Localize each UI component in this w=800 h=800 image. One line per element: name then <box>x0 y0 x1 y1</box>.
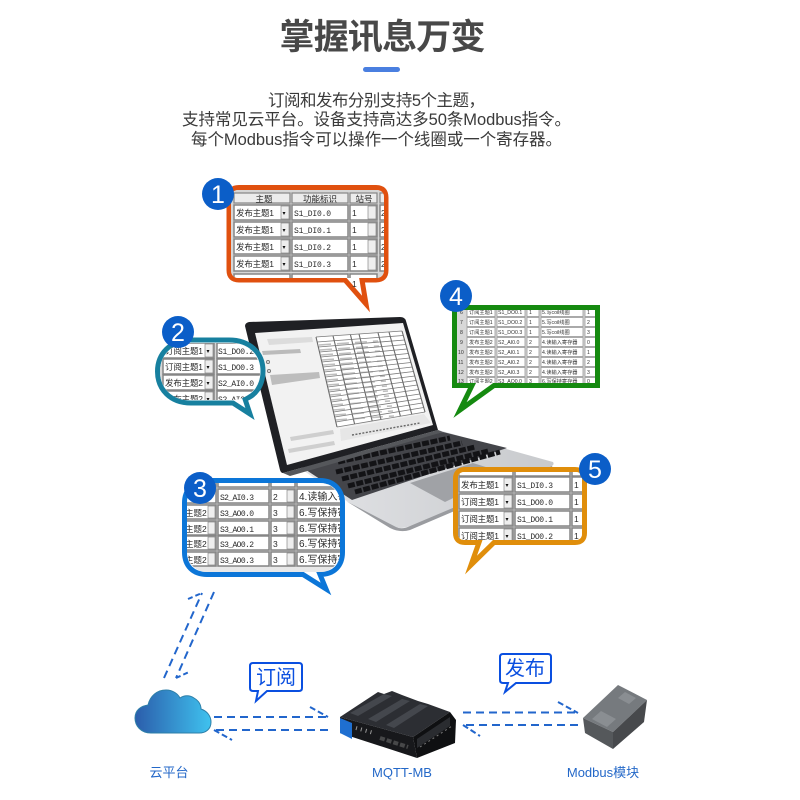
table 4: S3_AO0.0 <box>498 379 522 385</box>
callout: subscribe: 订阅 <box>256 666 296 689</box>
table 3: 主题2 <box>185 524 207 534</box>
table 4: 4.读输入寄存器 <box>542 348 578 356</box>
table 4: 2 <box>529 370 532 376</box>
table 1: 2 <box>381 208 386 218</box>
table 4: 1 <box>587 310 590 316</box>
table 4: 1 <box>529 310 532 316</box>
table 2: S1_DO0.2 <box>218 348 254 357</box>
table 4: 1 <box>587 350 590 356</box>
table 1: 2 <box>381 225 386 235</box>
table 4: 3 <box>587 370 590 376</box>
table 4: 5.写coil线圈 <box>542 308 570 316</box>
table 3: 主题2 <box>185 508 207 518</box>
table 3: 3 <box>273 524 278 534</box>
table 4: 13 <box>458 379 464 385</box>
arrows: callout to cloud <box>164 592 214 678</box>
callout 2: teal table <box>158 316 263 414</box>
arrows: gateway and Modbus module <box>463 702 578 736</box>
table 2: 发布主题2 <box>165 394 203 404</box>
table 4: 发布主题2 <box>469 368 493 376</box>
table 4: 0 <box>587 379 590 385</box>
table 5: S1_DO0.0 <box>517 499 553 508</box>
table 2: S2_AI0 <box>218 396 245 405</box>
laptop lid <box>245 317 438 473</box>
table 3: 6.写保持寄存器 <box>299 537 367 550</box>
badge 5 <box>579 453 611 485</box>
table 4: 5.写coil线圈 <box>542 318 570 326</box>
intro text: 订阅和发布分别支持5个主题， <box>268 91 485 110</box>
table 1: 主题 <box>255 194 273 204</box>
table 3: S3_AO0.2 <box>220 541 254 550</box>
table 4: S2_AI0.3 <box>498 370 519 376</box>
table 4: 10 <box>458 350 464 356</box>
table 1: 发布主题1 <box>236 242 274 252</box>
table 1: S1_DI0.3 <box>294 261 331 270</box>
table 2: S1_DO0.3 <box>218 364 254 373</box>
table 5: S1_DI0.3 <box>517 482 553 491</box>
table 1: 1 <box>352 225 357 235</box>
table 3: 4.读输入寄存器 <box>299 490 367 503</box>
badge 1: 1 <box>211 181 225 209</box>
table 4: 6.写保持寄存器 <box>542 377 578 385</box>
badge 3: 3 <box>193 475 207 503</box>
table 1: 功能标识 <box>303 194 337 204</box>
table 5: S1_DO0.2 <box>517 533 553 542</box>
callout 4: green table <box>440 280 598 410</box>
table 1: ▾ <box>282 262 286 268</box>
table 2: 订阅主题1 <box>165 346 203 356</box>
table 4: 1 <box>529 320 532 326</box>
table 4: S2_AI0.2 <box>498 360 519 366</box>
table 4: 订阅主题1 <box>469 328 493 336</box>
intro text: 每个Modbus指令可以操作一个线圈或一个寄存器。 <box>191 130 562 149</box>
screen table <box>316 331 431 441</box>
table 5: ▾ <box>506 517 509 523</box>
table 4: 7 <box>460 320 463 326</box>
table 4: 2 <box>587 320 590 326</box>
laptop hinge <box>283 430 443 476</box>
table 1 <box>231 190 384 278</box>
arrows: cloud and gateway <box>214 707 328 740</box>
table 1: 2 <box>381 259 386 269</box>
table 4 <box>457 308 597 386</box>
table 4: 12 <box>458 370 464 376</box>
table 4: 发布主题2 <box>469 338 493 346</box>
callout: publish <box>500 654 551 692</box>
table 4: 订阅主题2 <box>469 377 493 385</box>
table 2: S2_AI0.0 <box>218 380 254 389</box>
table 1: S1_DI0.0 <box>294 210 331 219</box>
table 3: 3 <box>273 508 278 518</box>
badge 1 <box>202 178 234 210</box>
touchpad <box>410 463 505 502</box>
table 1: S1_DI0.2 <box>294 244 331 253</box>
table 5: 1 <box>574 480 579 490</box>
table 5: 1 <box>574 514 579 524</box>
table 4: 11 <box>458 360 463 366</box>
table 3: 6.写保持寄存器 <box>299 522 367 535</box>
label: Modbus module: Modbus模块 <box>567 765 639 780</box>
table 4: 发布主题2 <box>469 358 493 366</box>
table 5: ▾ <box>506 534 509 540</box>
table 3: 主题2 <box>185 539 207 549</box>
table 3: 6.写保持寄存器 <box>299 506 367 519</box>
laptop <box>245 317 554 531</box>
table 4: S2_AI0.0 <box>498 340 519 346</box>
table 3: 3 <box>273 539 278 549</box>
icon: MQTT-MB gateway <box>340 691 456 758</box>
table 5: 1 <box>574 497 579 507</box>
table 4: S1_DO0.2 <box>498 320 522 326</box>
table 4: 2 <box>529 360 532 366</box>
table 3: 主题2 <box>185 555 207 565</box>
table 4: 3 <box>587 330 590 336</box>
table 4: S1_DO0.3 <box>498 330 522 336</box>
table 1: 发布主题1 <box>236 208 274 218</box>
title: 掌握讯息万变 <box>280 18 486 57</box>
table 4: 订阅主题1 <box>469 308 493 316</box>
table 1: 1 <box>352 242 357 252</box>
table 2: ▾ <box>206 349 210 355</box>
table 4: 4.读输入寄存器 <box>542 338 578 346</box>
icon: cloud <box>135 690 211 733</box>
table 4: 4.读输入寄存器 <box>542 368 578 376</box>
table 1: ▾ <box>282 211 286 217</box>
table 3: 2 <box>273 492 278 502</box>
table 3: S3_AO0.1 <box>220 526 254 535</box>
keyboard <box>300 432 507 500</box>
table 1 overflow row: 1 <box>352 279 357 289</box>
table 5: S1_DO0.1 <box>517 516 553 525</box>
table 4: S2_AI0.1 <box>498 350 519 356</box>
callout 1: orange-red table <box>202 178 390 304</box>
table 4: 5.写coil线圈 <box>542 328 570 336</box>
intro text: 支持常见云平台。设备支持高达多50条Modbus指令。 <box>182 110 571 129</box>
table 3 <box>187 483 340 572</box>
badge 4: 4 <box>449 283 463 311</box>
callout: publish: 发布 <box>505 657 545 680</box>
table 4: 2 <box>529 340 532 346</box>
label: MQTT-MB: MQTT-MB <box>372 765 432 780</box>
table 4: 9 <box>460 340 463 346</box>
badge 4 <box>440 280 472 312</box>
table 1: ▾ <box>282 245 286 251</box>
table 1: 发布主题1 <box>236 225 274 235</box>
callout 5: amber table <box>456 453 611 565</box>
table 2 <box>160 343 260 400</box>
table 1: ▾ <box>282 228 286 234</box>
table 1: S1_DI0.1 <box>294 227 331 236</box>
table 5: ▾ <box>506 500 509 506</box>
callout 3: blue table <box>182 472 345 596</box>
title accent bar <box>363 67 400 72</box>
table 2: 订阅主题1 <box>165 362 203 372</box>
table 2: ▾ <box>206 397 210 403</box>
table 4: 4.读输入寄存器 <box>542 358 578 366</box>
table 5: 订阅主题1 <box>461 497 499 507</box>
table 3: S2_AI0.3 <box>220 494 254 503</box>
table 5: 发布主题1 <box>461 480 499 490</box>
table 5: 1 <box>574 531 579 541</box>
table 5: 订阅主题1 <box>461 531 499 541</box>
table 3: S3_AO0.3 <box>220 557 254 566</box>
badge 2: 2 <box>171 319 185 347</box>
table 3: 3 <box>273 555 278 565</box>
table 1: 1 <box>352 208 357 218</box>
table 5: 订阅主题1 <box>461 514 499 524</box>
laptop base deck <box>300 430 554 528</box>
table 5: ▾ <box>506 483 509 489</box>
table 5 <box>458 472 582 540</box>
table 2: 发布主题2 <box>165 378 203 388</box>
table 1: 1 <box>352 259 357 269</box>
table 4: 2 <box>587 360 590 366</box>
table 4: 3 <box>529 379 532 385</box>
label: cloud platform: 云平台 <box>149 765 189 780</box>
table 4: 8 <box>460 330 463 336</box>
screen <box>255 323 433 465</box>
table 4: S1_DO0.1 <box>498 310 522 316</box>
badge 5: 5 <box>588 456 602 484</box>
table 4: 6 <box>460 310 463 316</box>
badge 3 <box>184 472 216 504</box>
icon: Modbus module <box>583 685 647 749</box>
table 1: 2 <box>381 242 386 252</box>
table 2: ▾ <box>206 381 210 387</box>
intro text <box>182 91 571 149</box>
table 4: 2 <box>529 350 532 356</box>
screen sidebar <box>262 337 335 453</box>
table 1: 发布主题1 <box>236 259 274 269</box>
table 4: 发布主题2 <box>469 348 493 356</box>
table 4: 0 <box>587 340 590 346</box>
table 2: ▾ <box>206 365 210 371</box>
table 3: S3_AO0.0 <box>220 510 254 519</box>
table 3: 6.写保持寄存器 <box>299 553 367 566</box>
callout: subscribe <box>250 663 302 701</box>
table 4: 订阅主题1 <box>469 318 493 326</box>
table 1: 站号 <box>355 194 373 204</box>
table 4: 1 <box>529 330 532 336</box>
